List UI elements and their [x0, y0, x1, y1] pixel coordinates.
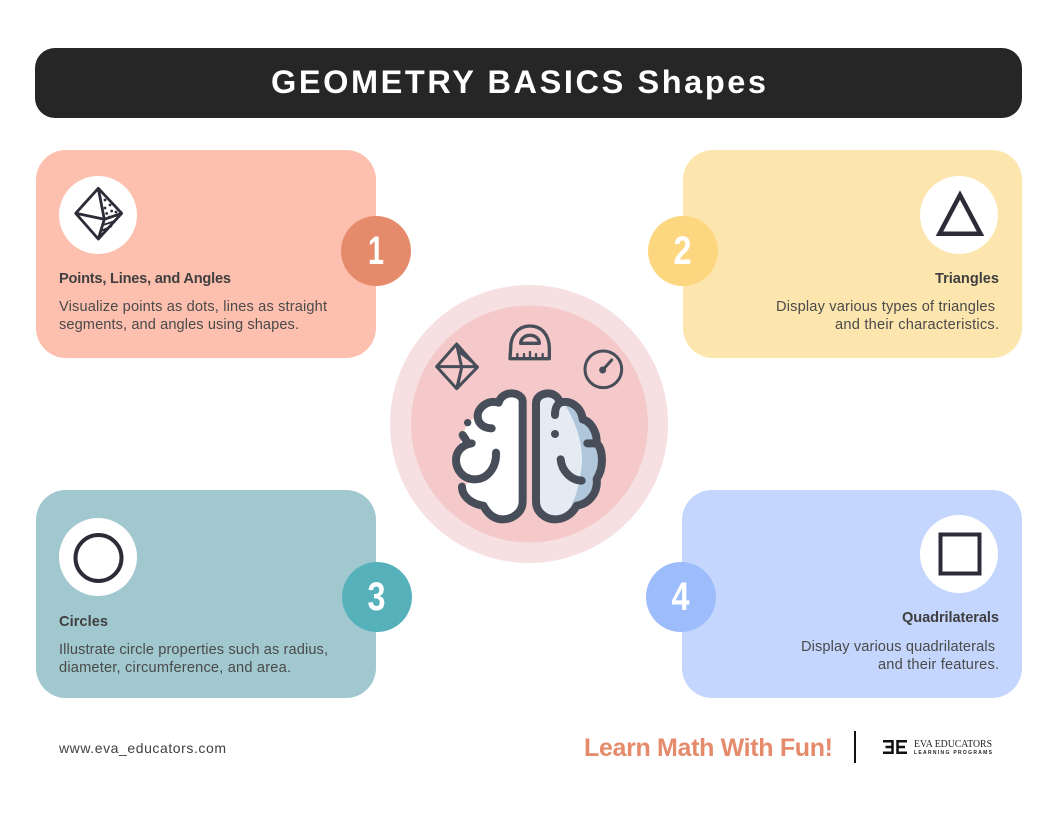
- body text: and their characteristics.: [835, 317, 999, 333]
- icon: gem in white circle: [59, 176, 137, 254]
- body text: Display various types of triangles: [776, 299, 995, 315]
- icon: protractor: [510, 326, 549, 359]
- divider: [854, 731, 856, 763]
- number badge 4: 4: [672, 575, 690, 619]
- logo: LEARNING PROGRAMS: [914, 750, 993, 756]
- icon: circle in white circle: [59, 518, 137, 596]
- icon: gauge: [585, 351, 622, 388]
- heading: Circles: [59, 614, 108, 630]
- panel: triangles: [648, 150, 1022, 358]
- number badge 1: 1: [368, 229, 384, 273]
- body text: and their features.: [878, 657, 999, 673]
- heading: Points, Lines, and Angles: [59, 271, 231, 287]
- logo: [883, 738, 993, 756]
- left hemisphere fill: [456, 393, 523, 519]
- central brain illustration: [390, 285, 668, 563]
- number badge 2: 2: [674, 229, 692, 273]
- heading: Quadrilaterals: [902, 610, 999, 626]
- title: GEOMETRY BASICS Shapes: [271, 64, 766, 100]
- icon: square in white circle: [920, 515, 998, 593]
- icon: small gem: [437, 344, 477, 389]
- right hemisphere shadow: [565, 405, 602, 506]
- body text: [801, 639, 999, 673]
- body text: Visualize points as dots, lines as straight: [59, 299, 327, 315]
- right hemisphere outline: [536, 393, 602, 519]
- brain: [456, 393, 602, 519]
- body text: [59, 299, 327, 333]
- brain dots: [464, 419, 559, 438]
- panel: quadrilaterals: [646, 490, 1022, 698]
- number badge 3: [342, 562, 412, 632]
- number badge 4: [646, 562, 716, 632]
- number badge 2: [648, 216, 718, 286]
- panel: points, lines and angles: [36, 150, 411, 358]
- body text: segments, and angles using shapes.: [59, 317, 299, 333]
- body text: [776, 299, 999, 333]
- logo: EVA EDUCATORS: [914, 738, 992, 750]
- body text: diameter, circumference, and area.: [59, 660, 291, 676]
- number badge 3: 3: [368, 575, 386, 619]
- title banner: [35, 48, 1022, 118]
- tagline: Learn Math With Fun!: [584, 734, 833, 762]
- icon: triangle in white circle: [920, 176, 998, 254]
- right hemisphere: [536, 393, 602, 519]
- heading: Triangles: [935, 271, 999, 287]
- body text: [59, 642, 328, 676]
- body text: Display various quadrilaterals: [801, 639, 995, 655]
- website: www.eva_educators.com: [58, 740, 226, 756]
- panel: circles: [36, 490, 412, 698]
- number badge 1: [341, 216, 411, 286]
- body text: Illustrate circle properties such as radius,: [59, 642, 328, 658]
- left hemisphere outline: [456, 393, 523, 519]
